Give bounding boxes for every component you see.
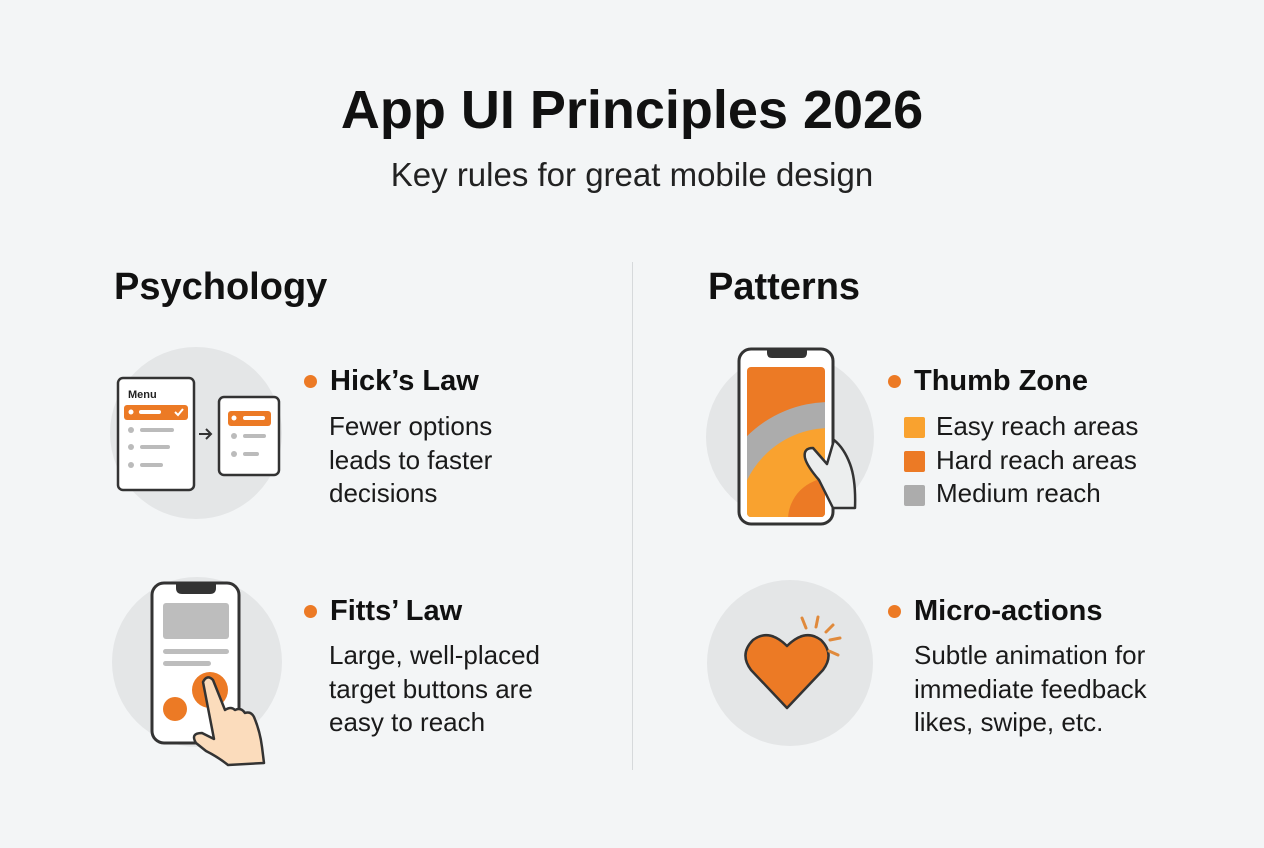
- icon: Hick's law menus: Menu: [128, 389, 157, 401]
- item: Thumb Zone: Hard reach areas: [936, 444, 1137, 474]
- icon: Hick's law menus: [110, 347, 282, 519]
- item: Hick's Law: decisions: [329, 478, 437, 508]
- item: Fitts' Law: [304, 595, 540, 737]
- item: Fitts' Law: target buttons are: [329, 674, 533, 704]
- item: Micro-actions: [888, 595, 1147, 737]
- item: Hick's Law: leads to faster: [329, 444, 492, 474]
- heading: Psychology: Psychology: [114, 266, 327, 308]
- illustrations: [110, 347, 874, 766]
- item: Thumb Zone: Medium reach: [936, 478, 1101, 508]
- divider: [632, 262, 633, 770]
- item: Micro-actions: likes, swipe, etc.: [914, 707, 1103, 737]
- item: Thumb Zone: Thumb Zone: [914, 365, 1088, 397]
- item: Thumb Zone: Easy reach areas: [936, 411, 1138, 441]
- item: Hick's Law: Hick’s Law: [330, 365, 479, 397]
- item: Hick's Law: Fewer options: [329, 411, 492, 441]
- item: Micro-actions: Subtle animation for: [914, 640, 1145, 670]
- item: Micro-actions: immediate feedback: [914, 674, 1147, 704]
- item: Hick's Law: [304, 365, 492, 508]
- item: Fitts' Law: easy to reach: [329, 707, 485, 737]
- heading: Patterns: Patterns: [708, 266, 860, 308]
- icon: Fitts law phone: [112, 577, 282, 765]
- icon: heart: [707, 580, 873, 746]
- item: Fitts' Law: Large, well-placed: [329, 640, 540, 670]
- item: Micro-actions: Micro-actions: [914, 595, 1103, 627]
- subtitle: Key rules for great mobile design: [391, 156, 873, 193]
- icon: thumb zone phone: [706, 348, 874, 526]
- title: App UI Principles 2026: [341, 80, 923, 140]
- item: Fitts' Law: Fitts’ Law: [330, 595, 462, 627]
- item: Thumb Zone: [888, 365, 1138, 508]
